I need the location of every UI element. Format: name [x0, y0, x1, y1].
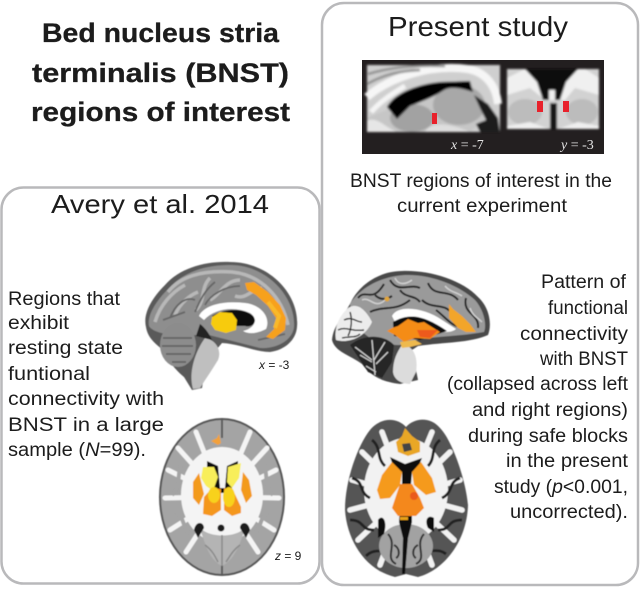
text block: functional connectivity description: (collapsed across left	[447, 374, 629, 395]
text block: ROI caption: current experiment	[397, 196, 568, 217]
text block: functional connectivity description: and right regions)	[472, 400, 628, 421]
panel heading: Present study: Present study	[388, 11, 568, 42]
slice: sagittal x = -7	[367, 65, 500, 132]
activation: medial frontal	[211, 434, 221, 445]
cerebellum	[350, 337, 394, 378]
brain: axial slice z = 9	[159, 418, 285, 576]
occipital lobe	[335, 306, 372, 341]
text block: functional connectivity description: during safe blocks	[468, 426, 628, 447]
text block: functional connectivity description: study (p<0.001,	[494, 477, 628, 498]
brainstem	[191, 338, 219, 389]
title: Bed nucleus stria	[42, 18, 280, 48]
label: z = 9: z = 9	[274, 549, 302, 563]
text block: resting state description: BNST in a large	[8, 415, 164, 436]
slice: coronal y = -3	[507, 69, 599, 129]
brain: sagittal slice present study	[332, 271, 490, 384]
text block: resting state description	[8, 289, 164, 461]
ROI markers	[537, 101, 569, 112]
corpus callosum	[392, 309, 456, 332]
brainstem	[393, 345, 417, 384]
brain: sagittal slice x = -3	[145, 262, 297, 390]
title: regions of interest	[31, 97, 290, 127]
ventricles	[390, 457, 422, 484]
text block: resting state description: funtional	[8, 364, 90, 385]
figure: BNST ROI slices	[362, 60, 604, 154]
text block: functional connectivity description: uncorrected).	[510, 502, 628, 523]
text block: resting state description: resting state	[8, 338, 123, 359]
text block: ROI caption: BNST regions of interest in the	[350, 171, 612, 192]
label: y = -3: y = -3	[559, 138, 594, 153]
ROI marker	[432, 113, 437, 124]
text block: functional connectivity description: connectivity	[520, 324, 629, 345]
activation: frontal	[396, 428, 420, 456]
activation: anterior cingulate	[245, 282, 286, 339]
ventricles	[207, 461, 238, 493]
panel heading: Avery et al. 2014: Avery et al. 2014	[51, 189, 269, 219]
activation: putamen	[193, 473, 204, 505]
text block: functional connectivity description: with BNST	[539, 349, 628, 370]
text block: functional connectivity description	[447, 272, 629, 523]
activation: BNST thalamus	[211, 312, 237, 333]
text block: resting state description: Regions that	[8, 289, 121, 310]
panel: Avery et al. 2014	[2, 188, 320, 584]
label: x = -7: x = -7	[450, 138, 484, 153]
text block: functional connectivity description: in the present	[506, 451, 629, 472]
text block: functional connectivity description: functional	[548, 298, 628, 319]
activation: thalamus	[203, 488, 221, 516]
activation: medial frontal	[449, 304, 476, 332]
brain: axial slice present study	[345, 420, 468, 577]
text block: functional connectivity description: Pattern of	[541, 272, 627, 293]
activation: subcortical	[387, 319, 440, 342]
activation: caudate	[201, 467, 218, 491]
corpus callosum	[199, 302, 267, 333]
title	[31, 18, 290, 127]
panel: Present study	[322, 3, 638, 585]
activation: thalamus	[392, 484, 424, 516]
text block: ROI caption	[350, 171, 612, 217]
cerebellum	[160, 323, 196, 367]
label: x = -3: x = -3	[258, 358, 290, 372]
activation: striatum	[377, 462, 402, 499]
text block: resting state description: connectivity with	[8, 389, 164, 410]
text block: resting state description: sample (N=99).	[8, 440, 146, 461]
text block: resting state description: exhibit	[8, 313, 70, 334]
title: terminalis (BNST)	[32, 58, 289, 88]
